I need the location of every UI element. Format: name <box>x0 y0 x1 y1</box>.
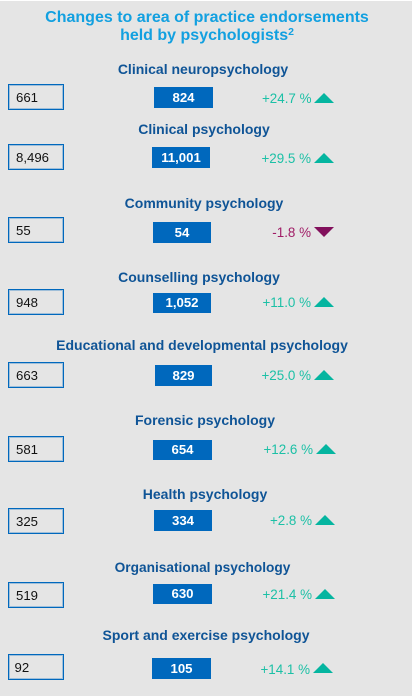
heading: Educational and developmental psychology <box>56 337 348 353</box>
icon: up arrow <box>314 93 334 103</box>
current value: 11,001 <box>161 150 201 165</box>
current value: 54 <box>175 225 189 240</box>
row: Counselling psychology <box>8 269 334 315</box>
title <box>45 9 369 44</box>
icon: up arrow <box>314 297 334 307</box>
previous value <box>8 144 64 170</box>
previous value <box>8 362 64 388</box>
row: Community psychology <box>8 195 334 243</box>
previous value: 325 <box>16 514 38 529</box>
row: Clinical psychology <box>8 121 334 170</box>
current value <box>153 222 211 243</box>
icon: up arrow <box>316 444 336 454</box>
current value <box>154 87 213 108</box>
icon: up arrow <box>315 515 335 525</box>
percentage change: +21.4 % <box>262 587 312 602</box>
current value: 334 <box>172 513 194 528</box>
row: Educational and developmental psychology <box>8 337 348 388</box>
row: Forensic psychology <box>8 412 336 462</box>
percentage change: -1.8 % <box>272 225 311 240</box>
current value: 824 <box>172 90 194 105</box>
current value <box>152 147 210 168</box>
previous value: 663 <box>16 368 38 383</box>
current value: 630 <box>171 586 194 601</box>
current value <box>153 293 211 313</box>
title: held by psychologists2 <box>120 26 294 44</box>
title: Changes to area of practice endorsements <box>45 9 369 26</box>
previous value: 581 <box>16 442 38 457</box>
current value: 1,052 <box>165 295 198 310</box>
heading: Organisational psychology <box>115 560 290 575</box>
heading: Forensic psychology <box>135 412 275 428</box>
heading: Health psychology <box>143 486 267 502</box>
current value <box>153 584 212 604</box>
current value <box>153 440 212 460</box>
previous value: 661 <box>16 90 38 105</box>
current value <box>152 658 211 679</box>
previous value <box>8 217 64 243</box>
icon: up arrow <box>315 589 335 599</box>
current value <box>154 510 212 531</box>
percentage change: +12.6 % <box>263 442 313 457</box>
percentage change: +2.8 % <box>270 513 312 528</box>
heading: Counselling psychology <box>118 269 280 285</box>
heading: Sport and exercise psychology <box>103 627 309 643</box>
previous value: 8,496 <box>16 150 49 165</box>
heading: Clinical neuropsychology <box>118 61 288 77</box>
previous value: 55 <box>16 223 31 238</box>
previous value <box>8 84 64 110</box>
row: Organisational psychology <box>8 560 335 608</box>
percentage change: +11.0 % <box>262 295 311 310</box>
previous value <box>8 436 64 462</box>
previous value <box>8 289 64 315</box>
current value: 829 <box>172 368 194 383</box>
previous value <box>8 508 64 534</box>
icon: up arrow <box>314 153 334 163</box>
icon: up arrow <box>313 663 333 673</box>
current value: 105 <box>170 661 192 676</box>
percentage change: +14.1 % <box>260 662 310 677</box>
row: Health psychology <box>8 486 335 534</box>
row: Clinical neuropsychology <box>8 61 334 110</box>
heading: Clinical psychology <box>138 121 270 137</box>
icon: down arrow <box>314 227 334 237</box>
previous value: 519 <box>16 588 38 603</box>
percentage change: +25.0 % <box>261 368 311 383</box>
previous value: 92 <box>14 660 29 675</box>
percentage change: +29.5 % <box>261 151 311 166</box>
previous value: 948 <box>16 295 38 310</box>
previous value <box>8 582 64 608</box>
percentage change: +24.7 % <box>262 91 312 106</box>
current value: 654 <box>171 442 194 457</box>
row: Sport and exercise psychology <box>8 627 333 680</box>
icon: up arrow <box>314 370 334 380</box>
current value <box>155 365 212 386</box>
previous value <box>8 654 64 680</box>
heading: Community psychology <box>125 195 283 211</box>
